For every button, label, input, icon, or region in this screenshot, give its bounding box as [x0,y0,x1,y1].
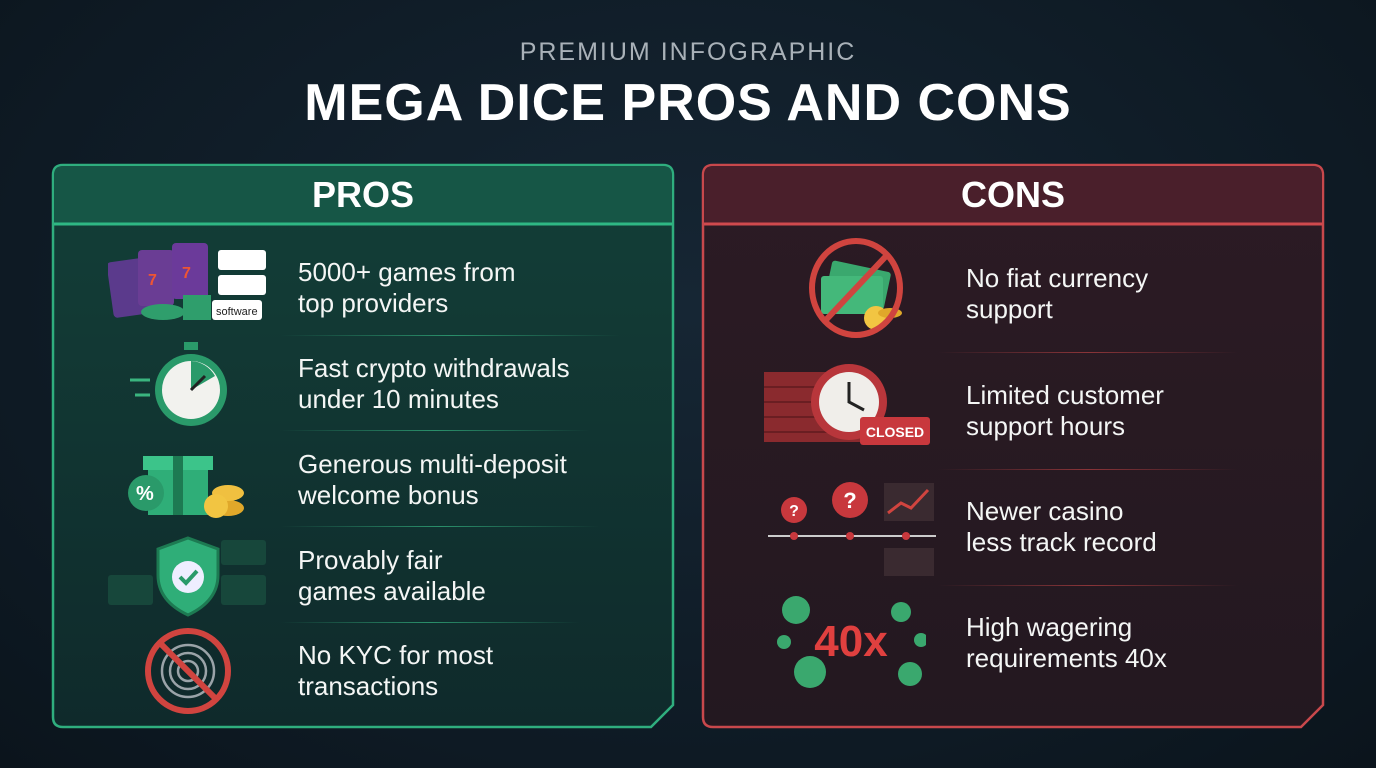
text: pro 1: top providers [298,288,448,318]
panel: pros [52,164,674,728]
text: pro 4: Provably fair [298,545,442,575]
text: con 3: less track record [966,527,1157,557]
text: pro 3: welcome bonus [298,480,479,510]
icon: shield check [108,536,266,616]
text: pro 4: games available [298,576,486,606]
panel: cons [702,164,1324,728]
heading: cons: CONS [961,174,1065,215]
text: con 1 [966,263,1148,324]
text: con 1: support [966,294,1053,324]
icon: gift bonus [128,456,244,518]
icon: game cards: 7 [148,272,157,289]
text: pro 2: Fast crypto withdrawals [298,353,570,383]
text: pro 2: under 10 minutes [298,384,499,414]
text: con 2 [966,380,1164,441]
icon: 40x wagering [777,596,926,688]
icon: closed clock: CLOSED [866,424,924,440]
text: pro 1 [298,257,516,318]
text: con 3 [966,496,1157,557]
icon: game cards [108,243,266,320]
text: con 3: Newer casino [966,496,1124,526]
text: con 2: support hours [966,411,1125,441]
icon: closed clock [764,364,930,445]
heading: pros: PROS [312,174,414,215]
text: pro 5: transactions [298,671,438,701]
icon: game cards: software [216,306,258,318]
icon: 40x wagering: 40x [814,617,888,666]
icon: timeline [768,482,936,576]
text: pro 5: No KYC for most [298,640,493,670]
title: MEGA DICE PROS AND CONS [304,74,1072,132]
icon: timeline: ? [789,503,799,520]
icon: gift bonus: % [136,483,154,505]
icon: no fingerprint [145,628,231,714]
text: con 2: Limited customer [966,380,1164,410]
text: pro 1: 5000+ games from [298,257,516,287]
subtitle: PREMIUM INFOGRAPHIC [520,38,856,66]
icon: timeline: ? [843,488,857,513]
text: con 4: requirements 40x [966,643,1167,673]
text: pro 2 [298,353,570,414]
text: con 1: No fiat currency [966,263,1148,293]
text: pro 5 [298,640,493,701]
text: con 4: High wagering [966,612,1132,642]
icon: game cards: 7 [182,265,191,282]
text: pro 4 [298,545,486,606]
icon: no cash [809,238,903,338]
icon: stopwatch [130,342,227,426]
text: con 4 [966,612,1167,673]
text: pro 3 [298,449,567,510]
text: pro 3: Generous multi-deposit [298,449,567,479]
